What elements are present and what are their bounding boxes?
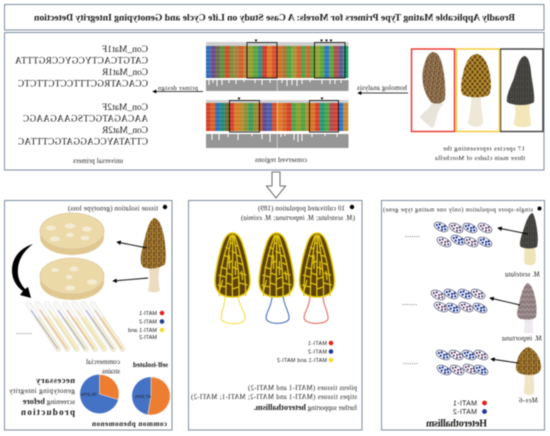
icon: morel with blue stipe — [259, 233, 294, 323]
text: species caption: three main clades of Morchella — [435, 155, 525, 162]
text: heterothallism support: pileus tissues (MATI-1 and MATI-2) — [248, 385, 357, 392]
legend: cultivated: MATI-2 — [308, 350, 327, 356]
legend: tubes: MATI-1 — [139, 311, 157, 317]
cluster: M. importuna spores: ....... — [402, 299, 417, 307]
text: cultivated population — [241, 205, 355, 222]
pie chart: commercial strains: strains — [102, 368, 120, 376]
legend: tubes: MATI-2 — [139, 335, 157, 341]
arrow: M. importuna — [490, 298, 520, 305]
arrow: primer design: primer design — [157, 85, 198, 92]
arrow: M. sextelata — [498, 228, 528, 234]
legend: tubes: MATI-2 — [139, 320, 157, 326]
icon: petri dish top — [40, 213, 104, 255]
arrow: curved black — [12, 244, 33, 298]
text: universal primers: universal primers — [73, 158, 123, 165]
text: heterothallism support — [191, 385, 357, 412]
text: Heterothallism: Heterothallism — [425, 418, 487, 430]
text: necessary screening: screening before — [22, 397, 75, 406]
panel: cultivated populations — [188, 200, 362, 430]
pie chart: self-isolated: 47.34% — [134, 394, 151, 400]
chart: alignment top left — [206, 40, 277, 91]
icon: M. sextelata morel — [520, 213, 538, 265]
pie chart: commercial strains: 70.37% — [80, 392, 97, 398]
text: heterothallism support: stipes tissues (MATI-1 and MATI-2; MATI-1; MATI-2) — [191, 394, 357, 401]
text: cultivated population: (M. sextelata; M. importuna; M. eximia) — [241, 215, 355, 222]
text: necessary screening: necessary — [35, 375, 75, 385]
title — [4, 4, 544, 30]
text: universal primers: Con_Mat1R — [101, 68, 148, 78]
text: M. importuna: M. importuna — [502, 334, 543, 342]
icon: M. importuna morel — [517, 283, 537, 333]
text: necessary screening: genotyping integrity — [9, 386, 75, 395]
pie chart: self-isolated: self-isolated — [133, 361, 168, 369]
text: ellipsis: ....... — [16, 328, 32, 336]
text: universal primers — [15, 45, 148, 165]
icon: black morel in black frame — [500, 49, 543, 132]
text: species caption: 17 species representing the — [443, 146, 525, 152]
text: universal primers: Con_Mat2R — [101, 126, 148, 136]
text: Mes-6: Mes-6 — [518, 396, 539, 404]
icon: petri dish bottom — [40, 258, 104, 300]
text: universal primers: CTTATAYCCAGGATGCTTTAC — [18, 136, 148, 146]
text: species caption — [435, 146, 525, 162]
text: cultivated population: 10 cultivated population (189) — [258, 206, 345, 212]
arrow: hollow down arrow — [266, 172, 286, 198]
icon: yellow morel in yellow frame — [456, 49, 500, 132]
legend: cultivated: MATI-1 — [308, 341, 327, 347]
arrow: Mes-6 — [491, 359, 518, 363]
cluster: M. sextelata spores — [405, 220, 493, 249]
pie chart: commercial strains: commercial — [86, 358, 120, 366]
legend: tubes: MATI-1 and — [128, 328, 157, 334]
species photos — [412, 49, 543, 132]
legend: single-spore: MATI-1 — [453, 400, 477, 408]
conserved regions alignments — [206, 40, 348, 164]
pie chart: self-isolated — [132, 361, 170, 415]
cluster: Mes-6 spores: ....... — [403, 358, 418, 366]
text: tissue isolation: tissue isolation (genotype loss) — [68, 206, 158, 212]
legend: single-spore — [453, 400, 487, 416]
text: necessary screening — [9, 375, 75, 417]
icon: morel specimen — [141, 218, 166, 292]
legend: cultivated — [277, 341, 333, 364]
text: necessary screening: production — [21, 407, 75, 417]
text: universal primers: CCACATRGCTTTCCTCTTCTC — [18, 78, 148, 88]
chart: alignment top right — [278, 40, 348, 91]
cluster: M. sextelata spores: ....... — [405, 231, 420, 239]
text: common phenomenon: common phenomenon — [92, 420, 167, 428]
legend: cultivated: MATI-1 and MATI-2 — [277, 358, 327, 364]
chart: alignment bottom right — [278, 98, 348, 148]
text: M. sextelata: M. sextelata — [504, 270, 541, 278]
panel: genotyping integrity — [4, 200, 172, 430]
arrow: homolog analysis: homolog analysis — [357, 85, 407, 92]
text: universal primers: AACAGATGCTSGAAGAAGC — [23, 114, 148, 124]
text: single-spore population: single-spore population (only one mating type gene) — [383, 206, 533, 214]
cluster: M. importuna spores — [402, 287, 488, 315]
icon: morel with yellow stipe — [215, 233, 250, 324]
panel: single-spore populations — [382, 200, 544, 430]
cluster: Mes-6 spores — [403, 348, 489, 377]
text: conserved regions: conserved regions — [255, 157, 307, 164]
arrows: from morel to dishes — [113, 242, 148, 281]
panel: primer design workflow — [4, 32, 544, 170]
legend: single-spore: MATI-2 — [453, 409, 477, 416]
chart: alignment bottom left — [206, 98, 277, 148]
text: universal primers: Con_Mat2F — [102, 103, 148, 113]
legend: tubes — [128, 311, 164, 341]
icon: morel with red stipe — [300, 233, 334, 323]
icon: Mes-6 morel — [516, 347, 541, 395]
text: universal primers: CATGTCACTYCGYCCRGTTTA — [15, 56, 148, 66]
pie chart: commercial strains — [80, 358, 120, 414]
title: Broadly Applicable Mating Type Primers for Morels: A Case Study on Life Cycle and Genotyping Integrity Detection — [33, 12, 515, 24]
icon: brown morel in red frame — [412, 49, 454, 132]
test tubes — [28, 304, 122, 349]
text: heterothallism support: further supporting heterothallism. — [254, 403, 357, 412]
text: universal primers: Con_Mat1F — [102, 45, 148, 55]
